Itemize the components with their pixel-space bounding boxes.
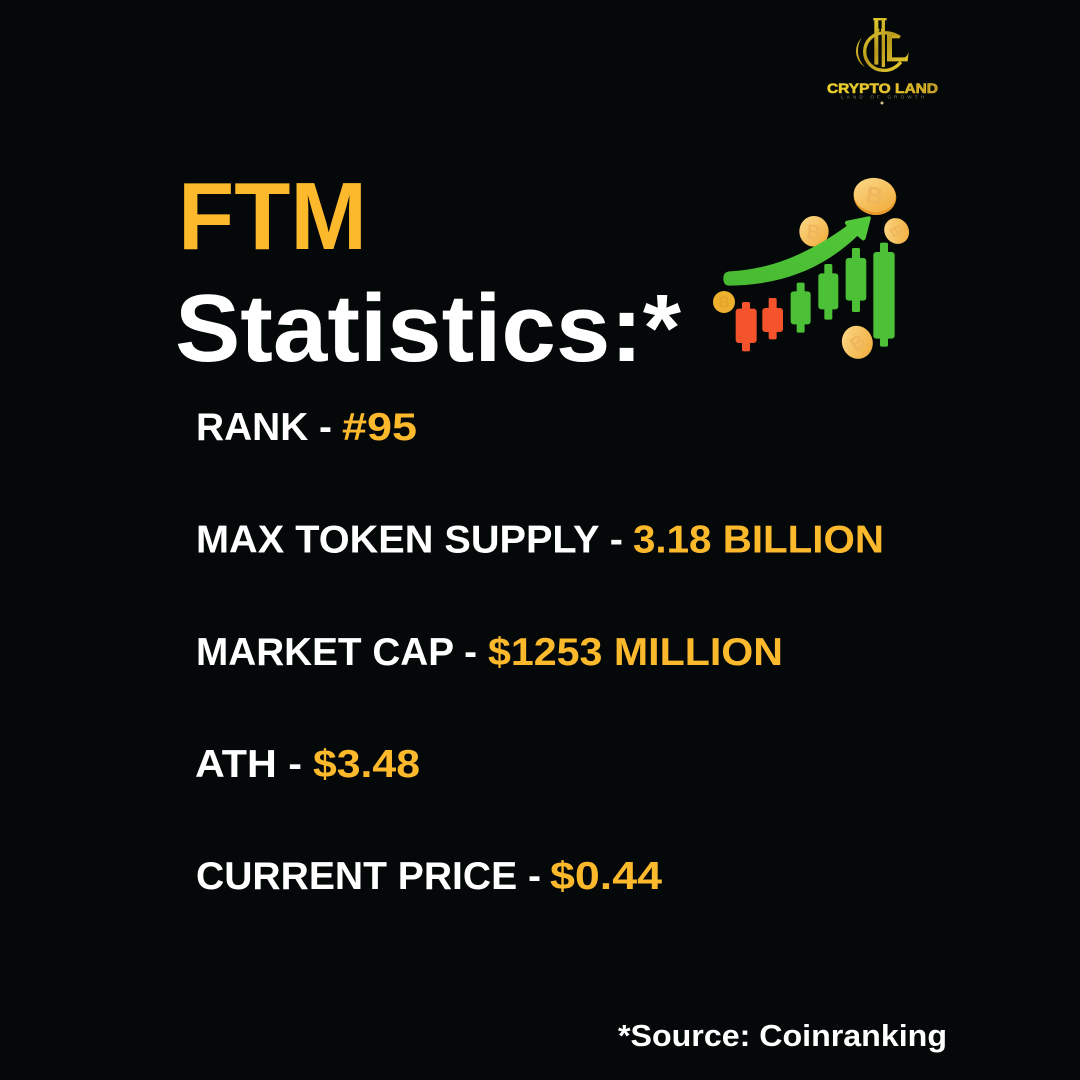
coin bottom bbox=[837, 321, 877, 363]
icon: candlestick chart with coins bbox=[713, 175, 914, 363]
stat: ath bbox=[195, 743, 420, 786]
green candle 4 bbox=[873, 243, 895, 347]
coin bottom: B bbox=[846, 331, 870, 356]
coin right: B bbox=[886, 223, 906, 241]
stat: market cap bbox=[196, 631, 783, 674]
green candle 3 bbox=[846, 248, 866, 312]
stat: market cap: $1253 MILLION bbox=[488, 631, 783, 674]
logo tagline: LAND OF GROWTH bbox=[841, 94, 924, 100]
stat: rank: #95 bbox=[342, 406, 417, 449]
logo wordmark: CRYPTO LAND bbox=[827, 80, 938, 96]
red candle 2 bbox=[762, 298, 783, 339]
stat: rank bbox=[196, 406, 417, 449]
stat: rank: RANK - bbox=[196, 406, 332, 449]
logo: Crypto Land bbox=[827, 18, 938, 105]
coin middle: B bbox=[806, 221, 822, 244]
stat: market cap: MARKET CAP - bbox=[196, 631, 477, 674]
stat: ath: ATH - bbox=[195, 743, 302, 786]
stat: max token supply bbox=[196, 518, 884, 562]
title: FTM: FTM bbox=[178, 163, 367, 270]
green candle 2 bbox=[818, 264, 838, 320]
stat: current price: $0.44 bbox=[550, 855, 663, 898]
stat: max token supply: 3.18 BILLION bbox=[633, 518, 884, 562]
title bbox=[175, 163, 682, 382]
coin top bbox=[851, 175, 899, 218]
red candle 1 bbox=[736, 302, 757, 351]
coin middle bbox=[799, 216, 829, 247]
stat: max token supply: MAX TOKEN SUPPLY - bbox=[196, 518, 623, 562]
title: Statistics: Statistics:* bbox=[175, 275, 682, 382]
arrow bbox=[723, 216, 871, 286]
coin right bbox=[879, 213, 914, 249]
stat: ath: $3.48 bbox=[313, 743, 420, 786]
source note: *Source: Coinranking bbox=[618, 1018, 947, 1053]
green candle 1 bbox=[791, 283, 811, 333]
stat: current price: CURRENT PRICE - bbox=[196, 855, 541, 898]
logo emblem bbox=[856, 18, 909, 70]
coin top: B bbox=[864, 181, 885, 210]
logo ornament bbox=[880, 102, 884, 104]
coin left: B bbox=[718, 295, 730, 312]
coin left bbox=[713, 291, 735, 313]
